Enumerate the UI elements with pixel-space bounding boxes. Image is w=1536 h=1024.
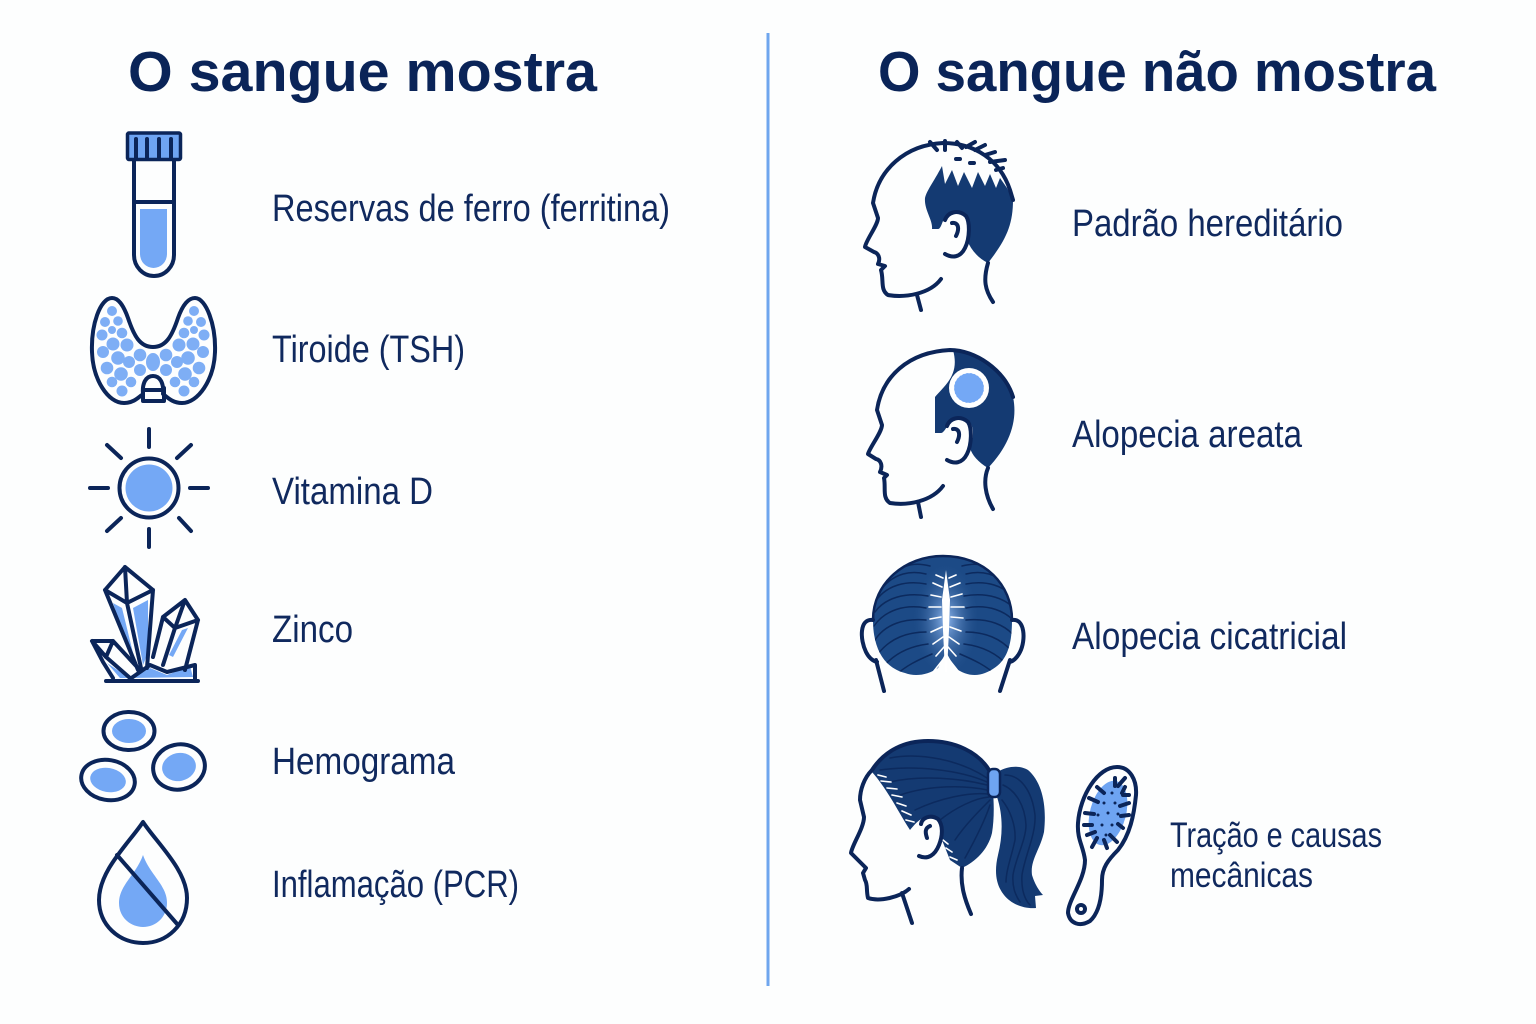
label: Padrão hereditário: Padrão hereditário <box>1072 203 1343 245</box>
icon: head with ponytail <box>851 740 1045 923</box>
icon: test tube <box>128 133 180 276</box>
label: Inflamação: Inflamação (PCR) <box>272 864 519 906</box>
icon: head with alopecia areata <box>868 350 1014 517</box>
title: O sangue mostra: O sangue mostra <box>128 40 598 104</box>
label: Tiroide: Tiroide (TSH) <box>272 329 465 371</box>
icon: back of head with cicatricial alopecia <box>862 556 1024 691</box>
label: Tração e causas mecânicas <box>1170 816 1382 895</box>
label: Tração e causas mecânicas: Tração e causas <box>1170 816 1382 855</box>
panel: o sangue não mostra <box>851 141 1382 924</box>
icon: crystals <box>92 567 198 681</box>
icon: head with hereditary pattern <box>865 141 1013 310</box>
title: O sangue não mostra: O sangue não mostra <box>878 40 1437 104</box>
label: Alopecia cicatricial: Alopecia cicatricial <box>1072 616 1347 658</box>
label: Alopecia areata: Alopecia areata <box>1072 414 1303 456</box>
label: Vitamina D: Vitamina D <box>272 471 433 513</box>
label: Reservas de ferro: Reservas de ferro (ferritina) <box>272 188 670 230</box>
label: Hemograma: Hemograma <box>272 741 456 783</box>
icon: thyroid <box>92 298 215 403</box>
panel: o sangue mostra <box>78 133 670 943</box>
label: Tração e causas mecânicas: mecânicas <box>1170 856 1313 895</box>
label: Zinco: Zinco <box>272 609 353 651</box>
icon: hairbrush <box>1068 767 1136 924</box>
icon: blood cells <box>78 712 209 804</box>
icon: crossed-out drop <box>99 822 187 943</box>
icon: sun <box>90 429 208 547</box>
